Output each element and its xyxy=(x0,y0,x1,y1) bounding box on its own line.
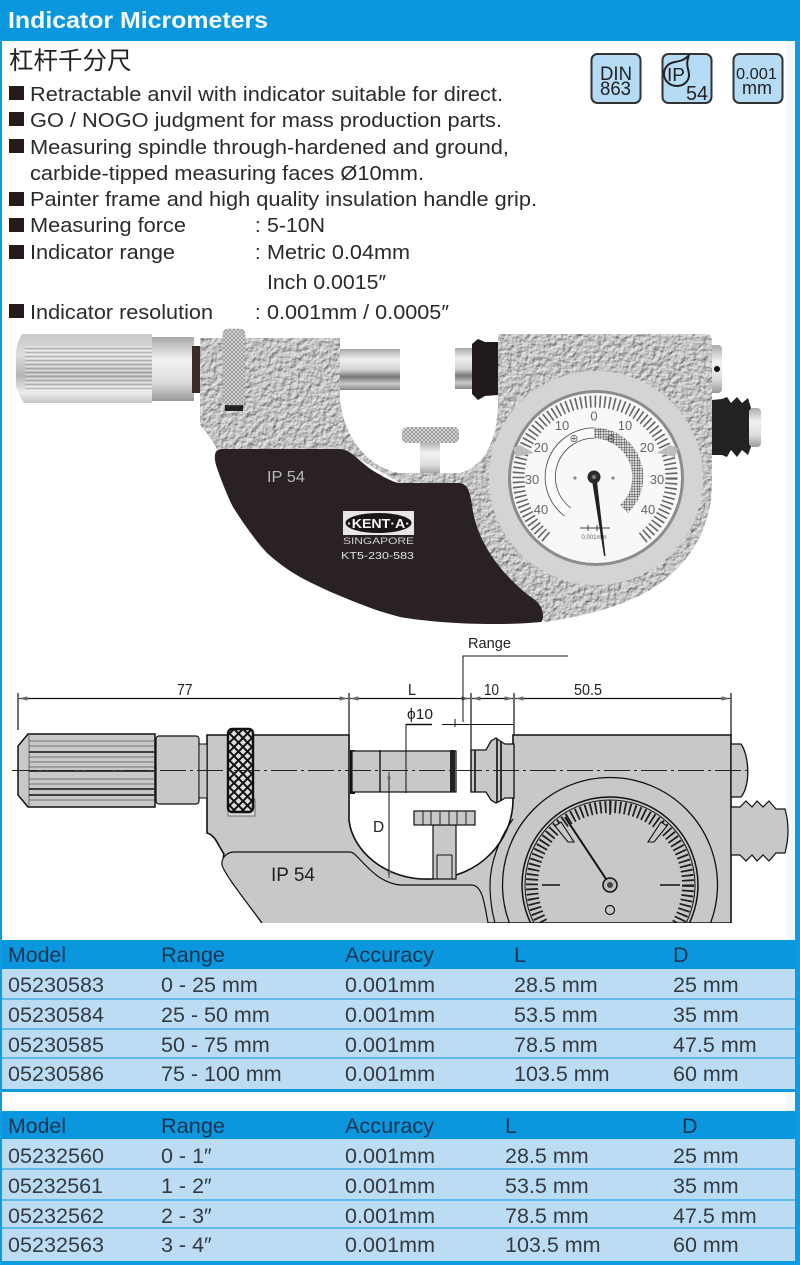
feature list xyxy=(9,84,537,324)
feature list: : xyxy=(255,302,261,324)
metric table: 0 - 25 mm xyxy=(161,973,258,997)
feature list: GO / NOGO judgment for mass production parts. xyxy=(30,110,502,132)
feature list: Measuring force xyxy=(30,215,186,237)
drawing dial ticks xyxy=(526,801,694,923)
metric table: Accuracy xyxy=(345,943,434,967)
metric table xyxy=(2,940,795,1092)
drawing dial markers xyxy=(542,800,680,885)
thimble xyxy=(16,334,152,403)
feature list: Inch 0.0015″ xyxy=(267,272,386,294)
metric table: 50 - 75 mm xyxy=(161,1033,270,1057)
dial ticks xyxy=(518,402,672,554)
metric table: 35 mm xyxy=(673,1003,739,1027)
inch table: Range xyxy=(161,1114,225,1138)
drawing anvil xyxy=(471,738,514,803)
logo: KENTA: ·KENT·A· xyxy=(347,516,410,531)
inch table: 35 mm xyxy=(673,1174,739,1198)
inch table: 53.5 mm xyxy=(505,1174,589,1198)
inch table: 0 - 1″ xyxy=(161,1144,212,1168)
dimension label: L: L xyxy=(408,682,416,699)
metric table: Model xyxy=(8,943,66,967)
inch table: 60 mm xyxy=(673,1233,739,1257)
anvil detail xyxy=(475,739,501,802)
needle xyxy=(573,470,615,556)
icon: 0.001 mm xyxy=(734,54,782,103)
dimension lines xyxy=(18,656,731,878)
drawing thimble xyxy=(18,734,207,807)
icon: DIN 863: 863 xyxy=(600,78,631,100)
inch table: 0.001mm xyxy=(345,1233,435,1257)
drawing t-knob xyxy=(414,811,475,879)
dial numbers: 20 xyxy=(640,440,654,455)
dimension label: Range: Range xyxy=(468,636,511,652)
metric table: 53.5 mm xyxy=(514,1003,598,1027)
inch table: 78.5 mm xyxy=(505,1204,589,1228)
metric table: 103.5 mm xyxy=(514,1062,610,1086)
icon: DIN 863 xyxy=(592,54,640,103)
drawing body xyxy=(207,735,731,923)
icon: 0.001 mm: mm xyxy=(742,78,772,98)
dark collar xyxy=(192,346,201,393)
metric table: 05230585 xyxy=(8,1033,104,1057)
dial gauge xyxy=(489,371,703,585)
inch table xyxy=(2,1111,795,1265)
title bar: Indicator Micrometers xyxy=(8,7,268,33)
technical drawing xyxy=(12,638,789,923)
metric table: 0.001mm xyxy=(345,1033,435,1057)
spindle xyxy=(338,349,400,390)
feature list: Measuring spindle through-hardened and ground, xyxy=(30,137,509,159)
plus and minus marks: ⊖ xyxy=(606,434,616,444)
metric table: 0.001mm xyxy=(345,1003,435,1027)
handle label: IP 54: IP 54 xyxy=(267,469,305,486)
metric table: 05230583 xyxy=(8,973,104,997)
metric table: 28.5 mm xyxy=(514,973,598,997)
dial numbers: 30 xyxy=(650,472,664,487)
feature list: 0.001mm / 0.0005″ xyxy=(267,302,449,324)
inch table: 3 - 4″ xyxy=(161,1233,212,1257)
dial numbers: 40 xyxy=(534,502,548,517)
tolerance markers xyxy=(513,445,678,457)
black anvil collar xyxy=(472,339,498,400)
inch table: 1 - 2″ xyxy=(161,1174,212,1198)
tolerance arc xyxy=(550,433,638,512)
dial numbers: 20 xyxy=(534,440,548,455)
metric table: 47.5 mm xyxy=(673,1033,757,1057)
inch table: D xyxy=(682,1114,698,1138)
logo: KENTA: SINGAPORE xyxy=(343,536,414,546)
logo: KENTA: KT5-230-583 xyxy=(341,551,415,562)
inch table: 05232562 xyxy=(8,1204,104,1228)
plus and minus marks: ⊕ xyxy=(569,434,579,444)
dimension label: phi 10: ϕ10 xyxy=(407,706,433,723)
icon: DIN 863: DIN xyxy=(600,63,632,85)
metric table: 0.001mm xyxy=(345,1062,435,1086)
metric table: 25 mm xyxy=(673,973,739,997)
inch table: 28.5 mm xyxy=(505,1144,589,1168)
dimension label: 10: 10 xyxy=(484,682,499,699)
dimension label: 50.5: 50.5 xyxy=(574,682,602,699)
drawing spindle xyxy=(350,750,456,794)
icon: IP 54: IP xyxy=(667,65,685,85)
metric table: D xyxy=(673,943,689,967)
dial numbers: 40 xyxy=(641,502,655,517)
dial numbers: 10 xyxy=(618,418,632,433)
feature list: carbide-tipped measuring faces Ø10mm. xyxy=(30,163,424,185)
right caps and knob xyxy=(708,345,761,457)
feature list: : xyxy=(255,215,261,237)
dimension label: D: D xyxy=(373,819,384,836)
icon: IP 54: 54 xyxy=(686,83,708,105)
metric table: 25 - 50 mm xyxy=(161,1003,270,1027)
drawing label: IP 54: IP 54 xyxy=(271,865,315,886)
inch table: Accuracy xyxy=(345,1114,434,1138)
feature list: Retractable anvil with indicator suitable for direct. xyxy=(30,84,503,106)
lock ring xyxy=(223,329,245,411)
metric table: 05230586 xyxy=(8,1062,104,1086)
inch table: 2 - 3″ xyxy=(161,1204,212,1228)
dial numbers: 10 xyxy=(555,418,569,433)
drawing upper cap xyxy=(731,744,748,797)
dimension label: 77: 77 xyxy=(177,682,193,699)
feature list: Indicator range xyxy=(30,242,175,264)
inch table: 0.001mm xyxy=(345,1144,435,1168)
black handle xyxy=(215,449,543,624)
inch table: 0.001mm xyxy=(345,1174,435,1198)
drawing dial xyxy=(489,776,718,923)
icon: IP 54 xyxy=(662,54,712,105)
chinese subtitle: 杠杆千分尺 xyxy=(9,47,132,75)
knurled ring xyxy=(228,729,255,816)
title bar xyxy=(0,0,800,41)
feature list: Indicator resolution xyxy=(30,302,213,324)
feature list: Metric 0.04mm xyxy=(267,242,410,264)
scale note: 0,001mm xyxy=(581,535,607,541)
inch table: 47.5 mm xyxy=(673,1204,757,1228)
inch table: 25 mm xyxy=(673,1144,739,1168)
dial lower gap xyxy=(545,478,645,561)
inch table: 05232561 xyxy=(8,1174,103,1198)
icon: 0.001 mm: 0.001 xyxy=(736,66,777,83)
inch table: 05232560 xyxy=(8,1144,104,1168)
dial numbers xyxy=(525,408,664,517)
metric table: L xyxy=(514,943,526,967)
dial numbers: 30 xyxy=(525,472,539,487)
anvil xyxy=(455,348,473,389)
dial numbers: 0 xyxy=(590,408,598,424)
logo: KENTA xyxy=(341,511,415,562)
t-knob xyxy=(402,427,459,475)
inch table: L xyxy=(505,1114,517,1138)
metric table: 60 mm xyxy=(673,1062,739,1086)
metric table: 75 - 100 mm xyxy=(161,1062,282,1086)
metric table: 78.5 mm xyxy=(514,1033,598,1057)
metric table: Range xyxy=(161,943,225,967)
hammered frame xyxy=(200,334,712,622)
feature list: Painter frame and high quality insulation handle grip. xyxy=(30,189,537,211)
metric table: 0.001mm xyxy=(345,973,435,997)
plus and minus marks xyxy=(569,434,616,444)
drawing needle xyxy=(565,817,617,914)
inch table: 0.001mm xyxy=(345,1204,435,1228)
feature list: 5-10N xyxy=(267,215,325,237)
inch table: Model xyxy=(8,1114,66,1138)
centerline xyxy=(12,770,748,771)
metric table: 05230584 xyxy=(8,1003,104,1027)
scale note xyxy=(580,525,610,541)
handle outline xyxy=(222,852,488,923)
inch table: 103.5 mm xyxy=(505,1233,601,1257)
drawing lower knob xyxy=(731,801,788,861)
inch table: 05232563 xyxy=(8,1233,104,1257)
product photo: micrometer xyxy=(16,329,761,624)
neck xyxy=(152,337,194,401)
feature list: : xyxy=(255,242,261,264)
